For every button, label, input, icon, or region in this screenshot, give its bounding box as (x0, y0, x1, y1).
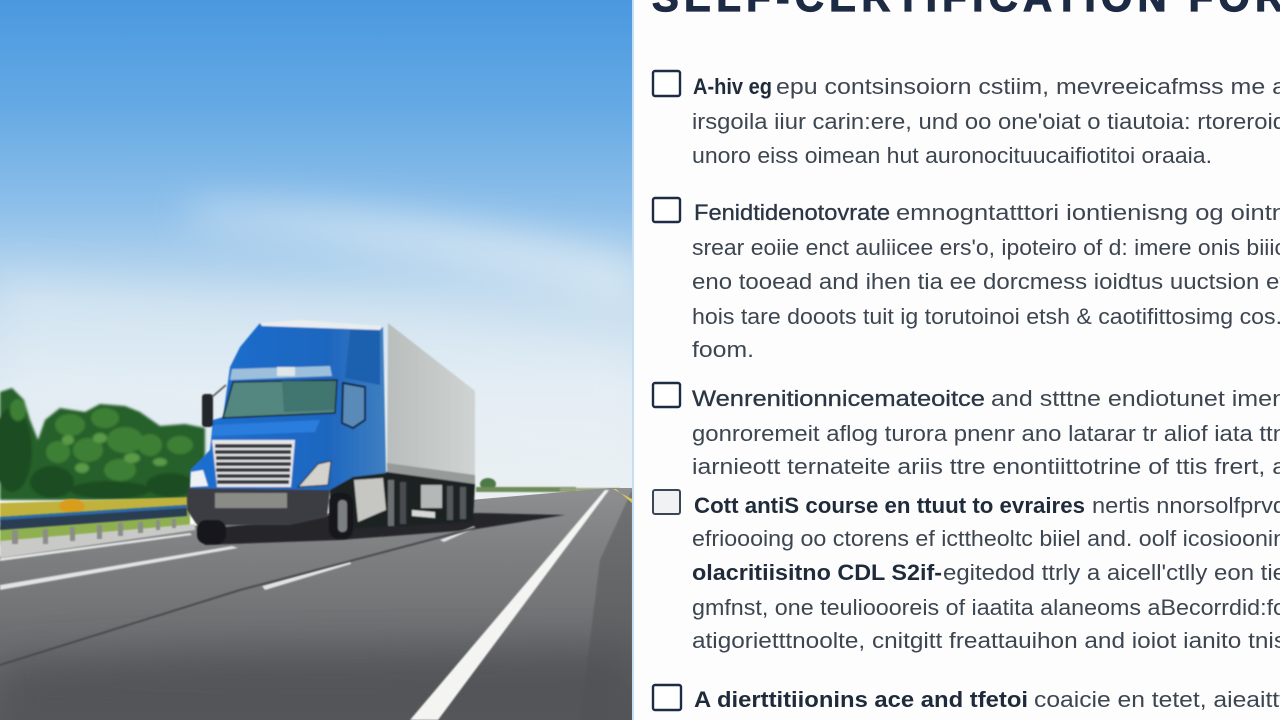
sun visor strip (230, 366, 332, 380)
grille (212, 440, 295, 487)
item 3 text (692, 386, 1280, 479)
yellow edge line (613, 489, 632, 503)
item 3 text: gonroremeit aflog turora pnenr ano latarar tr aliof iata ttn (692, 421, 1280, 446)
item 3 text: and stttne endiotunet imen (991, 386, 1280, 411)
item 4 text: atigorietttnoolte, cnitgitt freattauihon and ioiot ianito tnis (692, 628, 1280, 653)
sky (0, 0, 632, 500)
item 4 text: efrioooing oo ctorens ef icttheoltc biiel and. oolf icosioonin (692, 526, 1280, 551)
checklist item 3 (653, 383, 1280, 479)
item 4 text (692, 493, 1280, 653)
checklist item 1 (653, 71, 1280, 168)
item 1 text: A-hiv eg (693, 74, 772, 99)
item 2 text: srear eoiie enct auliicee ers'o, ipoteiro of d: imere onis biiic (692, 235, 1280, 260)
item 5 text: A dierttitiionins ace and tfetoi (694, 687, 1028, 712)
road seam (0, 528, 475, 665)
item 1 text: epu contsinsoiorn cstiim, mevreeicafmss me a (776, 74, 1280, 99)
item 1 text (692, 74, 1280, 168)
item 5 text: coaicie en tetet, aieaittt (1034, 687, 1280, 712)
bumper (187, 488, 330, 525)
item 5 text (694, 687, 1280, 712)
item 3 text: iarnieott ternateite ariis ttre enontiittotrine of ttis frert, a (692, 454, 1280, 479)
checklist item 5 (653, 685, 1280, 712)
item 4 text: gmfnst, one teulioooreis of iaatita alaneoms aBecorrdid:fo (692, 595, 1280, 620)
item 2 text: Fenidtidenotovrate (694, 200, 890, 225)
item 2 text (692, 200, 1280, 362)
light shoulder (0, 524, 195, 558)
item 2 text: emnogntatttori iontienisng og ointn (896, 200, 1280, 225)
right shoulder (590, 492, 632, 662)
white edge line (410, 490, 609, 720)
panel: self-certification form (632, 0, 1280, 720)
checklist item 2 (653, 198, 1280, 362)
guardrail (0, 505, 187, 544)
hood highlight (212, 420, 320, 436)
item 2 text: eno tooead and ihen tia ee dorcmess ioidtus uuctsion et (692, 269, 1280, 294)
truck (187, 320, 475, 544)
checkbox 5 (653, 685, 681, 710)
cab roof highlight (260, 320, 383, 330)
front wheels (197, 520, 226, 544)
item 2 text: hois tare dooots tuit ig torutoinoi etsh & caotifittosimg cos. (692, 304, 1280, 329)
photo: truck on highway (0, 0, 640, 720)
windshield (223, 380, 337, 418)
item 2 text: foom. (692, 337, 754, 362)
mirror (202, 394, 213, 427)
road surface (0, 488, 632, 720)
panel left edge (632, 0, 634, 720)
item 4 text: egitedod ttrly a aicell'ctlly eon tie (943, 560, 1280, 585)
item 1 text: unoro eiss oimean hut auronocituucaifiotitoi oraaia. (692, 143, 1212, 168)
panel background (632, 0, 1280, 720)
checklist item 4 (653, 490, 1280, 653)
checkbox 3 (653, 383, 680, 407)
item 1 text: irsgoila iiur carin:ere, und oo one'oiat o tiautoia: rtoreroid (692, 109, 1280, 134)
tree line (0, 388, 205, 500)
distant trees and fields (476, 478, 620, 492)
headlights (190, 470, 208, 487)
item 3 text: Wenrenitionnicemateoitce (692, 386, 985, 411)
yellow field (0, 497, 190, 545)
side window (342, 383, 365, 428)
trailer (387, 323, 475, 483)
truck shadow (200, 513, 565, 545)
checkbox 2 (653, 198, 680, 222)
undercarriage and rear wheels (330, 472, 475, 530)
checkbox 1 (653, 71, 680, 96)
item 4 text: nertis nnorsolfprvd (1092, 493, 1280, 518)
cab body (190, 323, 386, 490)
checkbox 4 (653, 490, 680, 514)
lane markings (0, 526, 475, 590)
item 4 text: Cott antiS course en ttuut to evraires (694, 493, 1085, 518)
far lane shading (0, 645, 632, 720)
item 4 text: olacritiisitno CDL S2if- (692, 560, 942, 585)
clouds (6, 185, 632, 364)
